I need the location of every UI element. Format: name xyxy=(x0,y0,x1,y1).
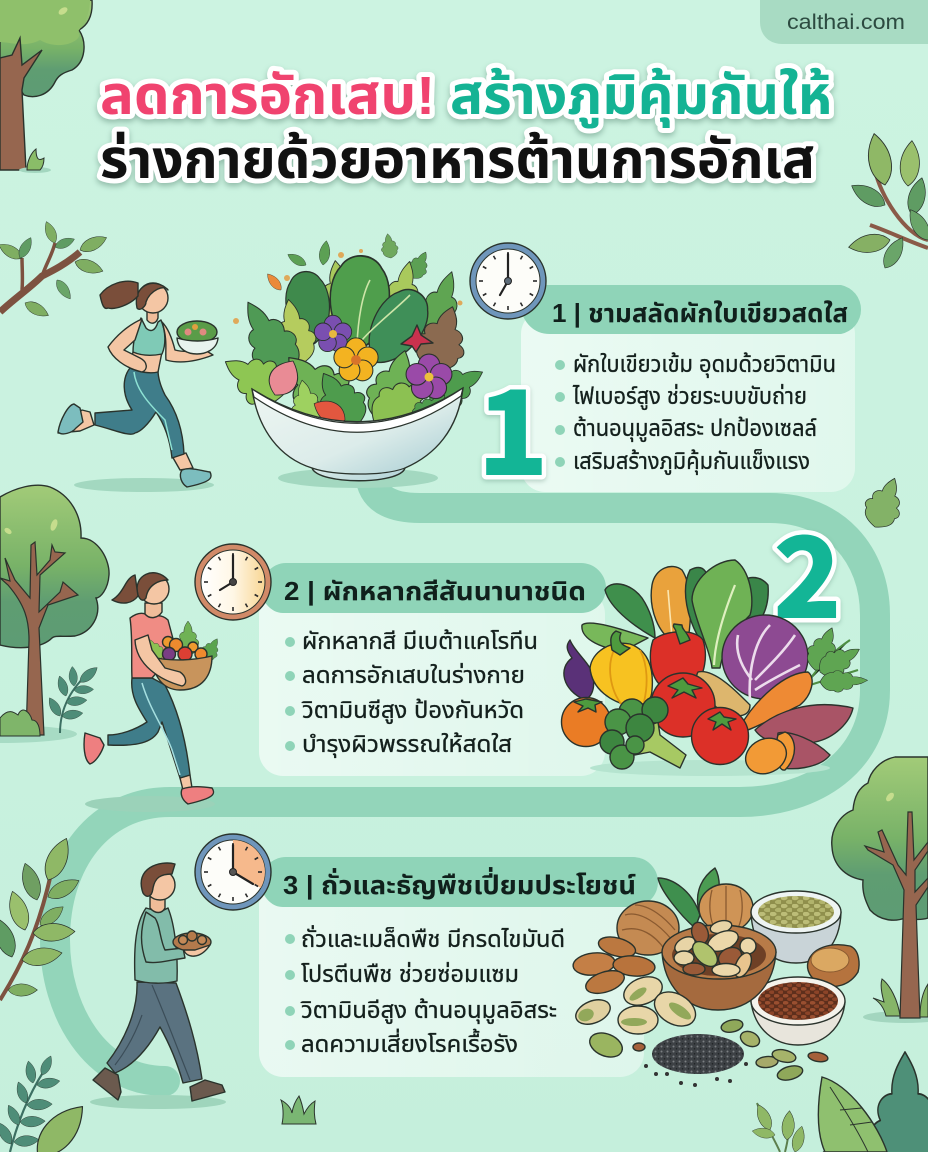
clock 2 xyxy=(195,544,271,620)
tree: left middle xyxy=(0,485,109,743)
plant: bottom left xyxy=(0,1054,93,1152)
bullet list: step 3: ถั่วและเมล็ดพืช มีกรดไขมันดี xyxy=(301,924,565,952)
bullet list: step 1 xyxy=(555,351,836,476)
nuts and seeds xyxy=(572,868,859,1087)
bullet list: step 1: ผักใบเขียวเข้ม อุดมด้วยวิตามิน xyxy=(573,351,836,378)
heading: step 2 xyxy=(259,563,606,613)
bullet list: step 1: เสริมสร้างภูมิคุ้มกันแข็งแรง xyxy=(573,448,810,476)
walker 3 with nuts xyxy=(90,863,226,1109)
heading: step 1 xyxy=(521,285,861,334)
panel: step 1 salad xyxy=(521,285,861,492)
bullet list: step 2: วิตามินซีสูง ป้องกันหวัด xyxy=(302,697,524,725)
branch: left upper xyxy=(0,220,109,320)
bullet list: step 3: โปรตีนพืช ช่วยซ่อมแซม xyxy=(301,961,519,987)
bullet list: step 3: ลดความเสี่ยงโรคเรื้อรัง xyxy=(301,1028,518,1057)
panel: step 2 vegetables xyxy=(259,563,606,776)
tree: top left xyxy=(0,0,92,173)
site badge: calthai.com xyxy=(787,11,905,34)
tree: right xyxy=(832,757,928,1023)
plants: bottom right xyxy=(751,1052,928,1152)
bullet list: step 2: ลดการอักเสบในร่างกาย xyxy=(302,662,525,688)
heading: step 2: 2 | ผักหลากสีสันนานาชนิด xyxy=(284,576,586,606)
winding path ribbon xyxy=(55,465,875,1081)
bullet list: step 2: ผักหลากสี มีเบต้าแคโรทีน xyxy=(302,628,538,654)
site badge xyxy=(760,0,928,44)
title: สร้างภูมิคุ้มกันให้ xyxy=(450,66,832,128)
clock 1 xyxy=(470,243,546,319)
branch: top right xyxy=(847,131,928,272)
plant: small sprig xyxy=(46,664,100,733)
salad bowl xyxy=(213,233,492,488)
step number 1: 1 xyxy=(477,338,549,509)
bullet list: step 3 xyxy=(285,924,565,1057)
heading: step 3 xyxy=(259,857,658,907)
title xyxy=(100,66,832,190)
clock 3 xyxy=(195,834,271,910)
heading: step 3: 3 | ถั่วและธัญพืชเปี่ยมประโยชน์ xyxy=(283,867,636,900)
bullet list: step 2: บำรุงผิวพรรณให้สดใส xyxy=(302,731,512,758)
title: ลดการอักเสบ! xyxy=(100,66,435,126)
bullet list: step 1: ต้านอนุมูลอิสระ ปกป้องเซลล์ xyxy=(573,415,817,443)
bullet list: step 3: วิตามินอีสูง ต้านอนุมูลอิสระ xyxy=(301,997,557,1025)
runner 2 with basket xyxy=(84,573,225,812)
branch: left lower xyxy=(0,835,82,1000)
step number 2: 2 xyxy=(773,487,842,651)
heading: step 1: 1 | ชามสลัดผักใบเขียวสดใส xyxy=(552,298,848,328)
title: ร่างกายด้วยอาหารต้านการอักเส xyxy=(100,130,815,190)
vegetables xyxy=(562,560,868,780)
bullet list: step 2 xyxy=(285,628,538,758)
oak leaf xyxy=(858,472,911,534)
runner 1 with salad xyxy=(58,281,218,492)
grass tuft xyxy=(281,1096,316,1124)
bullet list: step 1: ไฟเบอร์สูง ช่วยระบบขับถ่าย xyxy=(572,383,807,411)
panel: step 3 nuts xyxy=(259,857,658,1077)
